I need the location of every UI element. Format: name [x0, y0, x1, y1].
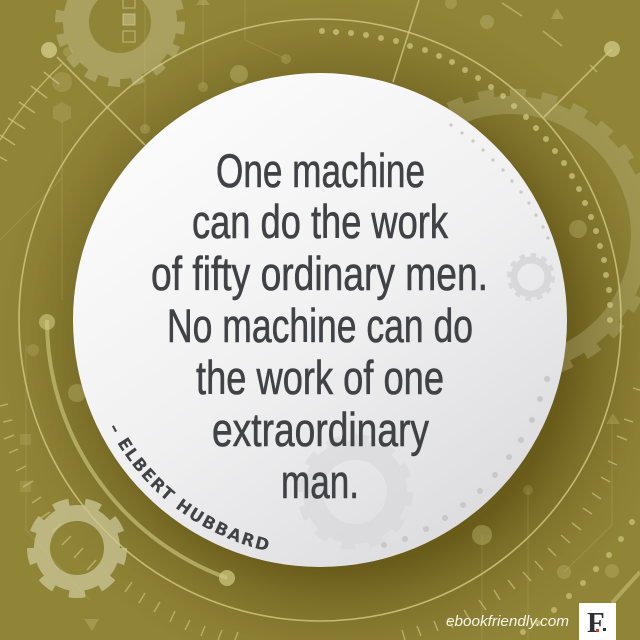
quote text: One machine [216, 144, 425, 197]
ticks outer ring [0, 388, 640, 640]
ticks top left [0, 72, 59, 161]
quote text [151, 144, 488, 508]
gear: top left [60, 0, 180, 82]
author credit: – ELBERT HUBBARD [112, 425, 268, 550]
main disc [73, 73, 567, 567]
quote text: man. [281, 455, 359, 508]
site url: ebookfriendly.com [446, 613, 569, 630]
dotted border inside disc [381, 123, 550, 548]
quote text: No machine can do [167, 299, 473, 352]
dotted arc lower right [520, 519, 635, 635]
logo [579, 603, 616, 640]
logo: F [587, 607, 605, 639]
quote text: can do the work [192, 195, 448, 248]
gear inside disc: right [509, 255, 553, 299]
quote text: of fifty ordinary men. [151, 247, 488, 300]
squares in top left gear [123, 0, 135, 42]
quote text: the work of one [196, 351, 444, 404]
gear: bottom left [31, 502, 123, 594]
gear: right [368, 93, 640, 377]
quote text: extraordinary [212, 403, 429, 456]
dotted arc upper right [319, 28, 613, 323]
gear inside disc: bottom [301, 438, 409, 546]
